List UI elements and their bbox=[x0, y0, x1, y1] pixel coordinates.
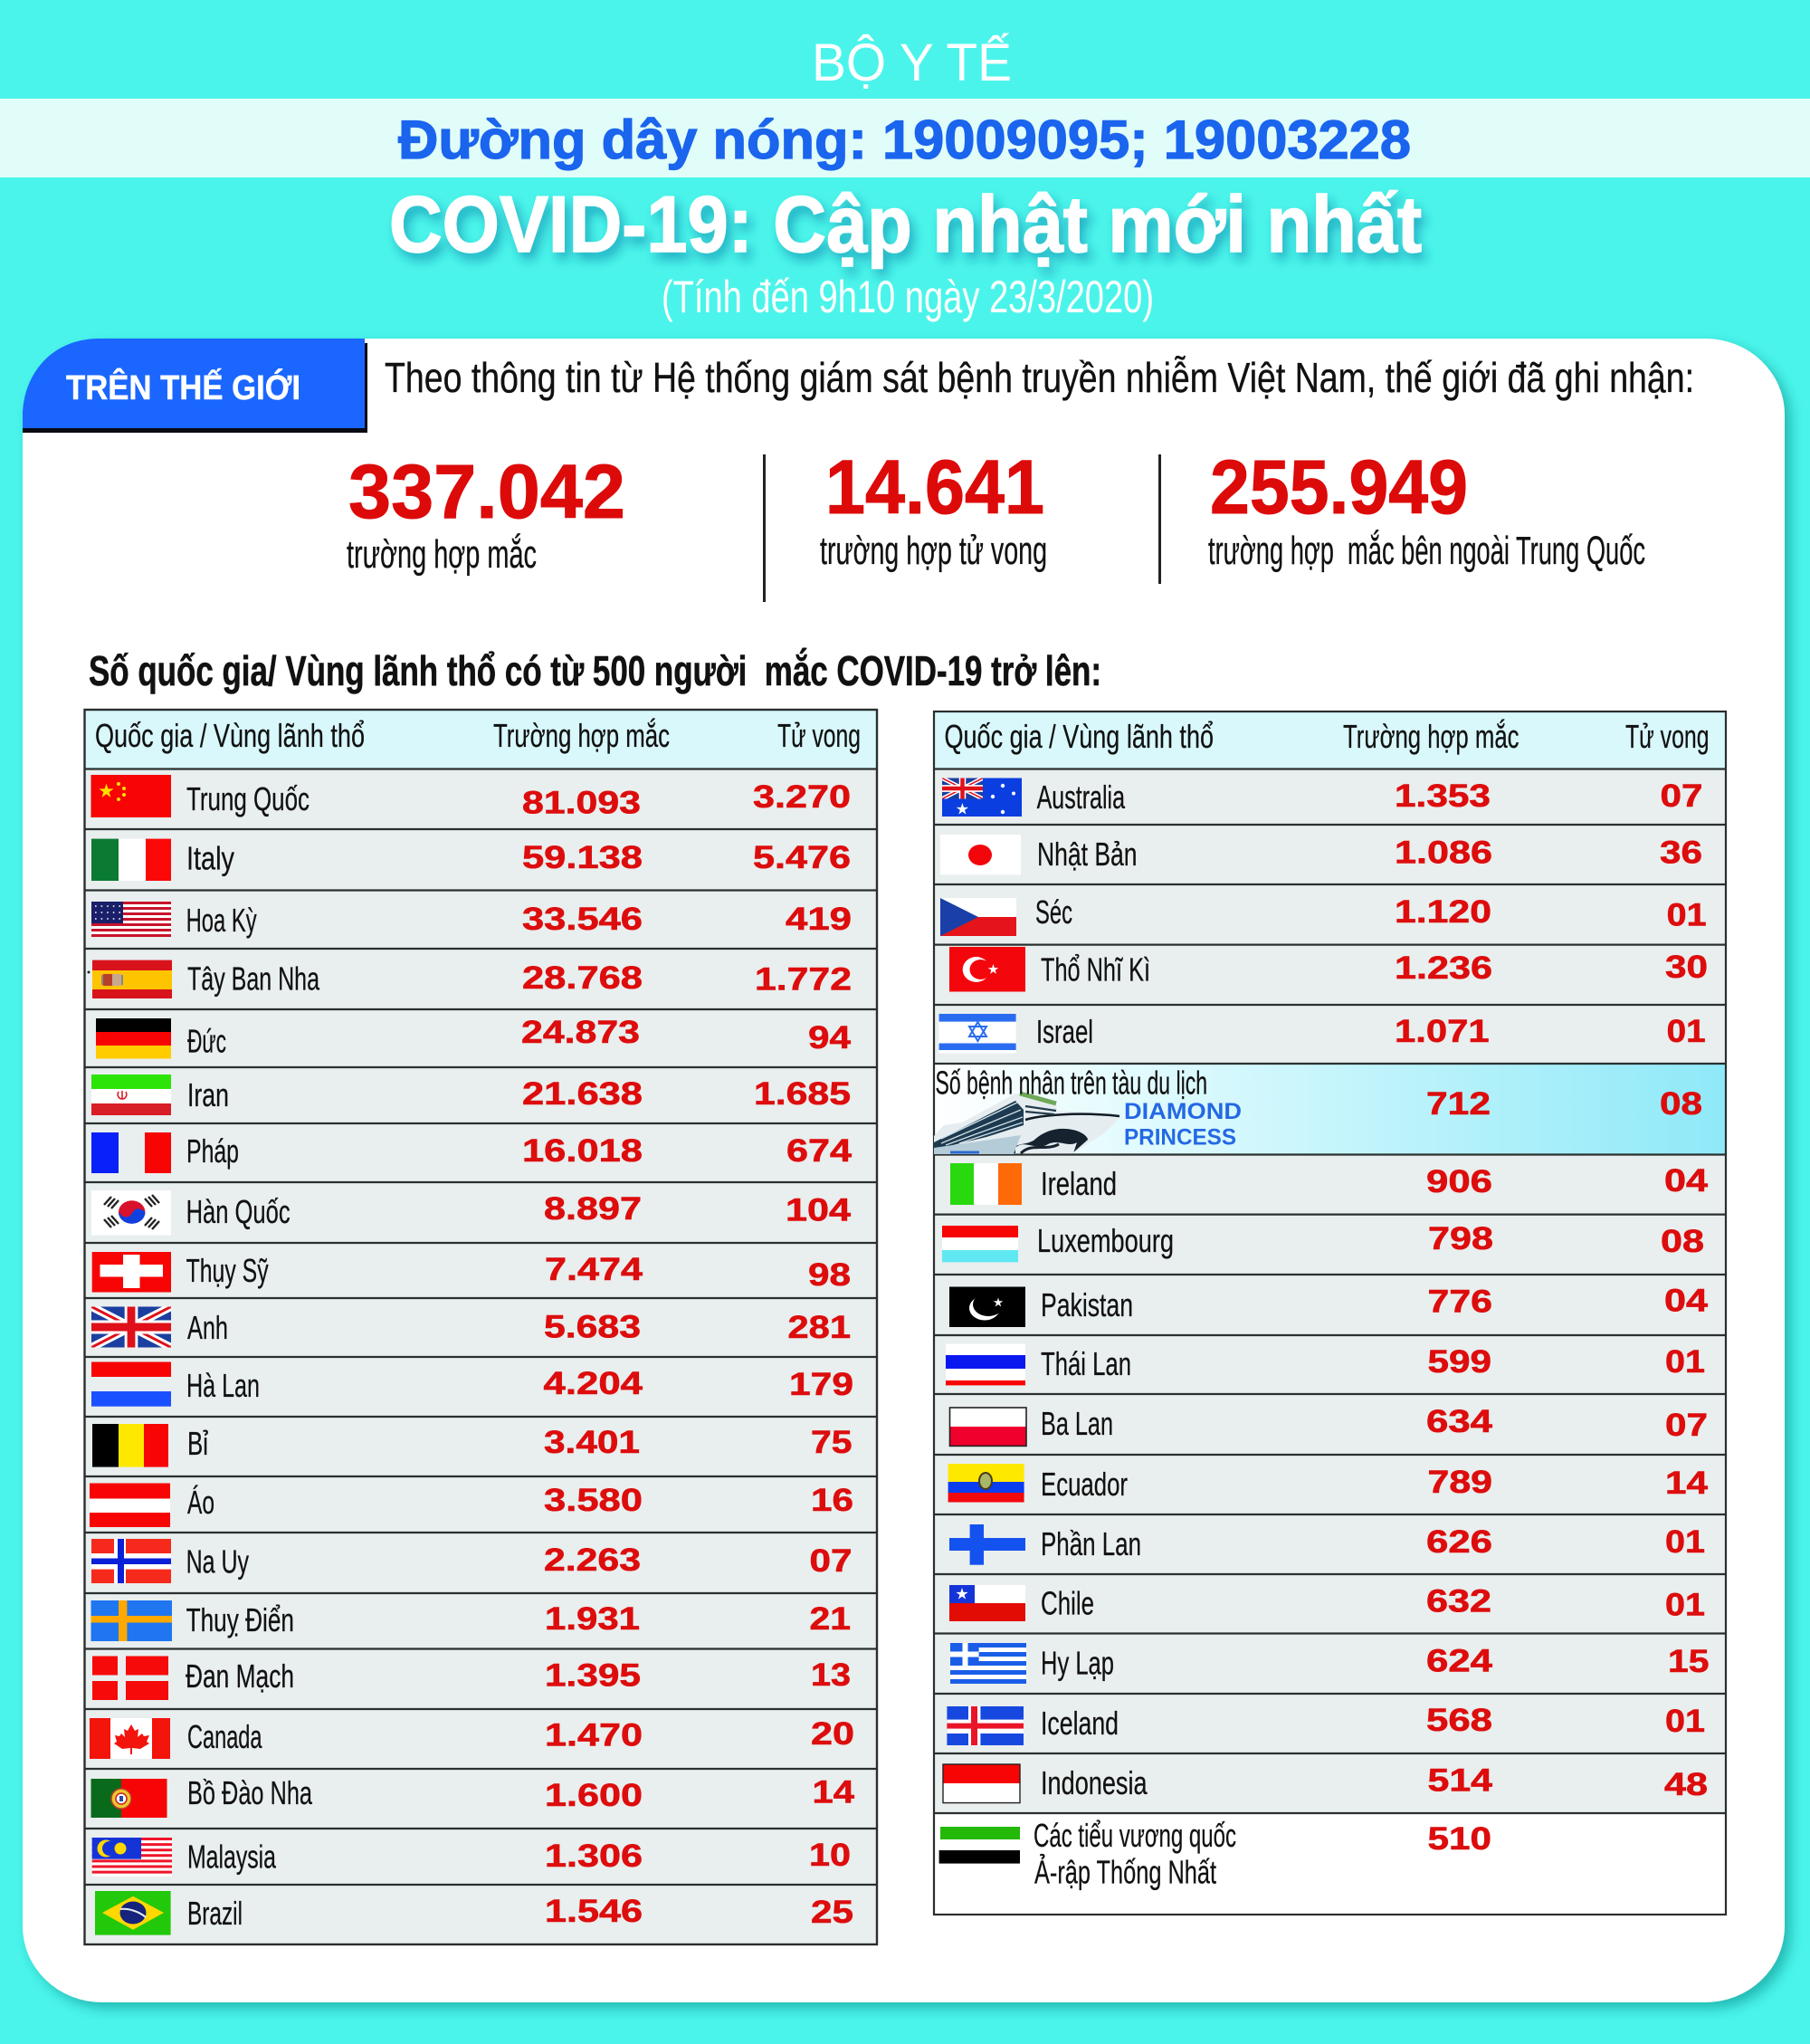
row: Indonesia: 48 bbox=[1664, 1767, 1708, 1802]
stat: cases outside China: 255.949 bbox=[1210, 444, 1468, 530]
left table header: Tử vong bbox=[777, 717, 861, 754]
row: Phần Lan: Phần Lan bbox=[1041, 1525, 1141, 1562]
row: Hoa Kỳ: 33.546 bbox=[522, 902, 643, 937]
row: Indonesia: Indonesia bbox=[1041, 1764, 1148, 1801]
row: Áo bbox=[90, 1483, 853, 1527]
row: Hy Lạp: 624 bbox=[1426, 1644, 1493, 1678]
row: Ecuador bbox=[948, 1464, 1709, 1503]
row: Italy: 5.476 bbox=[753, 840, 851, 875]
ship name: DIAMOND bbox=[1124, 1099, 1242, 1124]
row: Brazil: 25 bbox=[811, 1895, 853, 1930]
row: Malaysia bbox=[92, 1838, 851, 1877]
row: Iran: 21.638 bbox=[522, 1076, 643, 1112]
ship name bbox=[1124, 1099, 1242, 1150]
flag: Greece bbox=[950, 1643, 1026, 1684]
row: Các tiểu vương quốc Ả-rập Thống Nhất bbox=[939, 1817, 1491, 1890]
stat: cases outside China bbox=[1208, 444, 1645, 573]
row: Ecuador: 14 bbox=[1665, 1466, 1709, 1501]
row: Đức bbox=[96, 1015, 852, 1060]
row: Iceland: Iceland bbox=[1041, 1705, 1119, 1742]
flag: Malaysia bbox=[92, 1838, 172, 1877]
row: Đan Mạch: 13 bbox=[811, 1657, 851, 1693]
flag: Belgium bbox=[92, 1424, 168, 1467]
flag: South Korea bbox=[91, 1190, 171, 1236]
row: Na Uy bbox=[91, 1539, 853, 1583]
row: Hoa Kỳ: Hoa Kỳ bbox=[186, 902, 257, 939]
row: Hy Lạp: 15 bbox=[1668, 1644, 1709, 1679]
row: Bỉ bbox=[92, 1424, 853, 1467]
row: Bỉ: Bỉ bbox=[187, 1425, 208, 1462]
row: Đức: 24.873 bbox=[521, 1015, 640, 1050]
flag: Thailand bbox=[946, 1343, 1025, 1385]
title: COVID-19: Cập nhật mới nhất bbox=[389, 179, 1422, 269]
two-line country name: Các tiểu vương quốc bbox=[1034, 1817, 1236, 1854]
flag: Sweden bbox=[90, 1600, 172, 1641]
flag: Luxembourg bbox=[942, 1226, 1018, 1262]
row: Diamond Princess: 08 bbox=[1660, 1086, 1702, 1122]
row: Thổ Nhĩ Kì: Thổ Nhĩ Kì bbox=[1041, 951, 1150, 989]
row: Iran: Iran bbox=[187, 1076, 229, 1113]
ship row label: Số bệnh nhân trên tàu du lịch bbox=[936, 1065, 1207, 1101]
row: Hàn Quốc bbox=[91, 1190, 852, 1236]
left table header: Quốc gia / Vùng lãnh thổ bbox=[95, 717, 365, 754]
row: Hàn Quốc: 104 bbox=[786, 1193, 852, 1227]
row: Canada bbox=[90, 1716, 854, 1759]
row: Hy Lạp: Hy Lạp bbox=[1041, 1645, 1114, 1682]
row: Anh bbox=[91, 1307, 851, 1347]
row: Australia: Australia bbox=[1037, 778, 1126, 816]
row: Tây Ban Nha: 28.768 bbox=[522, 960, 643, 996]
row: Tây Ban Nha: Tây Ban Nha bbox=[187, 960, 320, 998]
stat: total deaths: trường hợp tử vong bbox=[820, 529, 1047, 573]
row: Brazil bbox=[95, 1891, 853, 1935]
flag: Poland bbox=[950, 1408, 1026, 1446]
row: Séc: 1.120 bbox=[1395, 894, 1491, 930]
row: Canada: Canada bbox=[187, 1718, 262, 1755]
row: Pháp: 674 bbox=[786, 1133, 853, 1169]
row: Thụy Điển: 21 bbox=[809, 1601, 851, 1637]
row: Hà Lan: Hà Lan bbox=[186, 1367, 260, 1404]
row: Áo: 16 bbox=[811, 1483, 853, 1518]
flag: China bbox=[90, 775, 171, 817]
row: Thái Lan: Thái Lan bbox=[1041, 1345, 1131, 1382]
row: Các tiểu vương quốc Ả-rập Thống Nhất: 510 bbox=[1428, 1821, 1491, 1857]
subtitle date: (Tính đến 9h10 ngày 23/3/2020) bbox=[662, 272, 1154, 322]
row: Thái Lan bbox=[946, 1343, 1705, 1385]
flag: Chile bbox=[949, 1585, 1025, 1621]
row: Luxembourg: 08 bbox=[1661, 1224, 1704, 1259]
row: Tây Ban Nha: 1.772 bbox=[755, 962, 852, 998]
flag: Germany bbox=[96, 1018, 171, 1059]
flag: Japan bbox=[940, 835, 1021, 874]
left table header bbox=[95, 717, 861, 754]
row: Diamond Princess: 712 bbox=[1426, 1086, 1491, 1122]
row: Ireland: Ireland bbox=[1041, 1165, 1117, 1202]
row: Thụy Điển bbox=[90, 1600, 851, 1641]
row: Nhật Bản: Nhật Bản bbox=[1037, 836, 1137, 873]
flag: Iran bbox=[91, 1075, 171, 1115]
flag: UAE bbox=[939, 1827, 1020, 1864]
row: Thụy Sỹ: 98 bbox=[808, 1257, 851, 1293]
row: Bỉ: 3.401 bbox=[544, 1425, 640, 1460]
row: Phần Lan bbox=[949, 1524, 1705, 1565]
row: Đan Mạch: 1.395 bbox=[545, 1658, 641, 1694]
row: Đức: Đức bbox=[187, 1023, 226, 1060]
row: Thụy Điển: Thuỵ Điển bbox=[186, 1601, 294, 1638]
row: Hàn Quốc: Hàn Quốc bbox=[186, 1193, 291, 1230]
header row: Tử vong bbox=[1625, 718, 1709, 755]
row: Nhật Bản: 1.086 bbox=[1395, 836, 1492, 871]
flag: Finland bbox=[949, 1524, 1025, 1565]
row: Đức: 94 bbox=[808, 1020, 852, 1055]
row: Hoa Kỳ bbox=[91, 902, 852, 939]
row: Italy bbox=[91, 839, 851, 881]
row: Séc: Séc bbox=[1035, 893, 1072, 931]
row: Iceland: 568 bbox=[1426, 1703, 1492, 1738]
row: Chile: 01 bbox=[1665, 1588, 1705, 1622]
row: Trung Quốc: 3.270 bbox=[753, 779, 851, 815]
row: Thụy Sỹ: Thụy Sỹ bbox=[186, 1252, 269, 1289]
row: Malaysia: 10 bbox=[809, 1838, 851, 1873]
row: Na Uy: Na Uy bbox=[186, 1543, 249, 1581]
flag: Turkey bbox=[949, 947, 1025, 992]
row: Pháp: Pháp bbox=[186, 1132, 239, 1170]
flag: Iceland bbox=[947, 1706, 1024, 1745]
flag: Australia bbox=[942, 778, 1022, 817]
flag: Canada bbox=[90, 1718, 170, 1759]
row: Phần Lan: 01 bbox=[1665, 1524, 1705, 1560]
flag: Netherlands bbox=[91, 1361, 171, 1407]
row: Bỉ: 75 bbox=[811, 1425, 853, 1460]
flag: Austria bbox=[90, 1483, 170, 1527]
row: Bồ Đào Nha bbox=[90, 1774, 855, 1818]
row: Diamond Princess background bbox=[934, 1064, 1726, 1155]
hotline band bbox=[0, 99, 1810, 177]
stat: total cases: 337.042 bbox=[348, 449, 625, 534]
row: Ba Lan: 634 bbox=[1426, 1404, 1493, 1439]
flag: Ecuador bbox=[948, 1464, 1024, 1503]
row: Brazil: Brazil bbox=[187, 1895, 243, 1932]
row: Séc bbox=[940, 893, 1707, 936]
row: Tây Ban Nha bbox=[87, 960, 852, 998]
row: Áo: 3.580 bbox=[544, 1483, 643, 1518]
row: Canada: 1.470 bbox=[545, 1718, 643, 1753]
row: Indonesia bbox=[943, 1763, 1708, 1803]
flag: Israel bbox=[939, 1014, 1016, 1054]
two-line country name bbox=[1034, 1817, 1236, 1890]
row: Chile: Chile bbox=[1041, 1585, 1094, 1622]
flag: Indonesia bbox=[943, 1764, 1020, 1803]
row: Trung Quốc: Trung Quốc bbox=[186, 780, 310, 817]
row: Thái Lan: 01 bbox=[1665, 1344, 1705, 1380]
panel: white main card bbox=[23, 339, 1785, 2002]
row: Australia: 07 bbox=[1660, 778, 1703, 814]
flag: Norway bbox=[91, 1539, 171, 1583]
row: Australia: 1.353 bbox=[1395, 778, 1491, 814]
row: Ba Lan: Ba Lan bbox=[1041, 1405, 1113, 1442]
row: Italy: 59.138 bbox=[522, 840, 643, 875]
row: Phần Lan: 626 bbox=[1426, 1524, 1492, 1560]
flag: Ireland bbox=[950, 1163, 1022, 1205]
row: Đan Mạch bbox=[92, 1657, 851, 1700]
row: Pakistan bbox=[949, 1284, 1709, 1327]
section heading: Số quốc gia/ Vùng lãnh thổ có từ 500 người mắc COVID-19 trở lên: bbox=[89, 647, 1101, 694]
row: Malaysia: Malaysia bbox=[187, 1838, 277, 1876]
row: Anh: 281 bbox=[787, 1310, 851, 1345]
tab: Trên thế giới bbox=[23, 339, 367, 433]
stat: total deaths: 14.641 bbox=[825, 444, 1044, 530]
row: Thái Lan: 599 bbox=[1428, 1344, 1491, 1380]
row: Thổ Nhĩ Kì: 30 bbox=[1665, 950, 1708, 985]
row: Australia bbox=[942, 778, 1703, 817]
row: Israel: 1.071 bbox=[1395, 1014, 1490, 1049]
flag: Spain bbox=[87, 960, 172, 998]
row: Pháp bbox=[91, 1132, 853, 1173]
flag: Pakistan bbox=[949, 1287, 1025, 1327]
row: Chile: 632 bbox=[1426, 1583, 1491, 1619]
hotline text: Đường dây nóng: 19009095; 19003228 bbox=[398, 110, 1411, 170]
table: right bbox=[934, 712, 1726, 1915]
flag: Brazil bbox=[95, 1891, 171, 1935]
table: left bbox=[84, 710, 877, 1944]
two-line country name: Ả-rập Thống Nhất bbox=[1034, 1853, 1216, 1890]
row: Israel: 01 bbox=[1667, 1014, 1706, 1049]
stat: total cases bbox=[347, 449, 625, 577]
header: organisation name: BỘ Y TẾ bbox=[812, 33, 1012, 92]
flag: Switzerland bbox=[92, 1252, 171, 1293]
row: Malaysia: 1.306 bbox=[545, 1839, 643, 1874]
flag: Portugal bbox=[90, 1779, 167, 1818]
row: Bồ Đào Nha: Bồ Đào Nha bbox=[187, 1774, 313, 1811]
row: Ireland: 906 bbox=[1426, 1164, 1492, 1199]
row: Indonesia: 514 bbox=[1428, 1763, 1493, 1799]
row: Luxembourg bbox=[942, 1221, 1704, 1262]
row: Ba Lan: 07 bbox=[1665, 1408, 1708, 1443]
header row: Trường hợp mắc bbox=[1343, 718, 1519, 755]
row: Chile bbox=[949, 1583, 1705, 1622]
row: Iran: 1.685 bbox=[754, 1076, 851, 1112]
row: Iran bbox=[91, 1075, 851, 1115]
row: Pakistan: Pakistan bbox=[1041, 1286, 1133, 1323]
left table header: Trường hợp mắc bbox=[493, 717, 670, 754]
tab label: TRÊN THẾ GIỚI bbox=[66, 368, 300, 407]
row: Ba Lan bbox=[950, 1404, 1708, 1446]
row: Ecuador: 789 bbox=[1428, 1465, 1492, 1500]
row: Hà Lan: 4.204 bbox=[543, 1366, 643, 1401]
row: Hà Lan bbox=[91, 1361, 853, 1407]
flag: Czech Republic bbox=[940, 898, 1016, 936]
row: Pháp: 16.018 bbox=[522, 1133, 643, 1169]
ship name: PRINCESS bbox=[1124, 1124, 1236, 1150]
flag: France bbox=[91, 1132, 171, 1173]
row: Anh: 5.683 bbox=[544, 1309, 641, 1345]
stat: total deaths bbox=[820, 444, 1047, 573]
row: Nhật Bản: 36 bbox=[1660, 836, 1702, 871]
row: Đan Mạch: Đan Mạch bbox=[186, 1657, 294, 1695]
row: Hàn Quốc: 8.897 bbox=[544, 1191, 642, 1227]
row: Luxembourg: 798 bbox=[1428, 1221, 1493, 1256]
row: Thụy Sỹ: 7.474 bbox=[545, 1252, 643, 1287]
row: Israel: Israel bbox=[1036, 1013, 1093, 1050]
row: Pakistan: 776 bbox=[1428, 1284, 1492, 1320]
row: Trung Quốc bbox=[90, 775, 851, 821]
flag: Italy bbox=[91, 839, 171, 881]
row: Iceland bbox=[947, 1703, 1705, 1745]
row: Iceland: 01 bbox=[1665, 1704, 1705, 1739]
row: Na Uy: 2.263 bbox=[544, 1543, 641, 1578]
row: Hy Lạp bbox=[950, 1643, 1709, 1684]
stat: total cases: trường hợp mắc bbox=[347, 532, 537, 577]
row: Hoa Kỳ: 419 bbox=[786, 902, 852, 937]
flag: United Kingdom bbox=[91, 1307, 171, 1347]
row: Israel bbox=[939, 1013, 1706, 1054]
flag: Denmark bbox=[92, 1657, 168, 1700]
row: Luxembourg: Luxembourg bbox=[1037, 1222, 1174, 1259]
header row: Quốc gia / Vùng lãnh thổ bbox=[945, 718, 1214, 755]
icon: cruise ship bbox=[934, 1094, 1121, 1154]
row: Na Uy: 07 bbox=[809, 1543, 853, 1579]
row: Thụy Sỹ bbox=[92, 1252, 851, 1293]
row: Ecuador: Ecuador bbox=[1041, 1466, 1128, 1503]
row: Séc: 01 bbox=[1667, 898, 1707, 932]
flag: USA bbox=[91, 902, 171, 937]
row: Ireland: 04 bbox=[1664, 1163, 1709, 1199]
row: Canada: 20 bbox=[811, 1716, 854, 1752]
row: Anh: Anh bbox=[187, 1309, 228, 1346]
header row bbox=[945, 718, 1709, 755]
row: Pakistan: 04 bbox=[1664, 1284, 1709, 1319]
row: Bồ Đào Nha: 1.600 bbox=[545, 1778, 643, 1813]
row: Thụy Điển: 1.931 bbox=[545, 1601, 640, 1637]
row: Nhật Bản bbox=[940, 835, 1702, 874]
row: Thổ Nhĩ Kì bbox=[949, 947, 1708, 992]
row: Bồ Đào Nha: 14 bbox=[813, 1775, 855, 1810]
row: Italy: Italy bbox=[186, 840, 234, 876]
row: Ireland bbox=[950, 1163, 1709, 1205]
row: Thổ Nhĩ Kì: 1.236 bbox=[1395, 950, 1492, 986]
row: Diamond Princess bbox=[934, 1065, 1702, 1154]
row: Brazil: 1.546 bbox=[545, 1894, 643, 1929]
row: Hà Lan: 179 bbox=[789, 1367, 853, 1402]
row: Trung Quốc: 81.093 bbox=[522, 786, 641, 821]
row: Áo: Áo bbox=[187, 1484, 214, 1521]
